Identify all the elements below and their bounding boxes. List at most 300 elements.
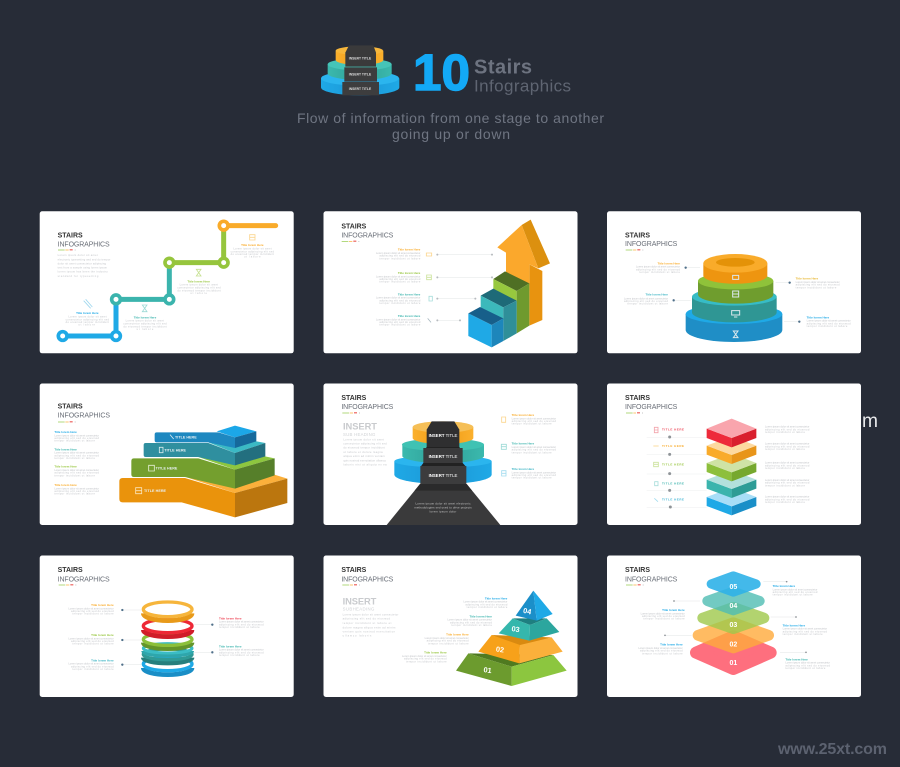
label: 05: Title lorem Here xyxy=(773,584,796,588)
label: right 2: Title lorem Here xyxy=(512,442,535,446)
intro paragraph: text from a sample using lorem ipsum xyxy=(58,266,108,270)
label: right bottom xyxy=(807,315,851,328)
insert heading: INSERT xyxy=(343,596,377,606)
insert paragraph: ut labore et dolore magna xyxy=(343,450,383,454)
icon: pencil xyxy=(84,299,92,308)
label: right 3: tempor incididunt ut labore xyxy=(512,476,552,480)
label: step 1: Title lorem Here xyxy=(76,311,99,315)
label: right top: tempor incididunt ut labore xyxy=(796,285,837,289)
label: left 3: Title lorem Here xyxy=(91,658,114,662)
label: 05: tempor incididunt ut labore xyxy=(773,593,813,597)
label: 03: Title lorem Here xyxy=(783,623,806,627)
label list: Title lorem Here xyxy=(54,483,77,487)
label: left 2: Lorem ipsum dolor sit amet consectetur xyxy=(68,636,114,640)
row icons and leader lines xyxy=(426,253,493,322)
label: right 2: tempor incididunt ut labore xyxy=(512,450,552,454)
panel heading: STAIRS xyxy=(341,223,367,230)
intro paragraph: dolor sit amet consectetur adipiscing xyxy=(58,261,107,265)
label: row 4: Title lorem Here xyxy=(398,314,421,318)
pyramid numbers: 03 xyxy=(511,624,520,634)
label: 03: Title lorem Here xyxy=(469,614,492,618)
label: right 2: tempor incididunt ut labore xyxy=(219,653,260,657)
label: 04: tempor incididunt ut labore xyxy=(643,617,685,621)
label: 02: adipiscing elit sed do eiusmod xyxy=(427,639,469,643)
right text blocks: tempor incididunt ut labore xyxy=(765,430,806,434)
label: right 3 xyxy=(502,467,557,480)
watermark fragment: m: m xyxy=(862,411,878,432)
label: row 1: tempor incididunt ut labore xyxy=(379,256,421,260)
panel heading xyxy=(341,567,394,585)
label: 03: adipiscing elit sed do eiusmod xyxy=(450,620,493,624)
step labels: TITLE HERE xyxy=(144,489,167,493)
panel heading: STAIRS xyxy=(58,232,83,239)
label: row 4: tempor incididunt ut labore xyxy=(379,323,421,327)
panel heading xyxy=(341,223,394,242)
diamond numbers: 01 xyxy=(729,660,737,667)
label: step 3: ut labore xyxy=(190,291,208,295)
insert paragraph: Lorem ipsum dolor sit amet consectetur xyxy=(343,612,398,616)
label: row 4: Lorem ipsum dolor sit amet consectetur xyxy=(376,317,420,321)
chart: four-tier cake xyxy=(686,254,782,342)
label: step 2: ut labore xyxy=(137,327,154,331)
label: left 1: Title lorem Here xyxy=(91,603,114,607)
label: 03 xyxy=(771,616,828,636)
label: right 1: Title lorem Here xyxy=(512,413,535,417)
chart: stacked rings xyxy=(143,602,192,675)
panel heading: STAIRS xyxy=(625,567,650,574)
right text blocks: tempor incididunt ut labore xyxy=(765,500,806,504)
label list: tempor incididunt ut labore xyxy=(54,439,96,443)
panel heading: STAIRS xyxy=(341,395,367,402)
panel: insert title cake with dark stairs xyxy=(324,384,578,525)
label list: Title lorem Here xyxy=(54,430,77,434)
label: left bottom xyxy=(624,293,669,306)
insert heading xyxy=(343,422,377,437)
panel heading xyxy=(625,232,678,250)
label: 01: tempor incididunt ut labore xyxy=(785,666,826,670)
diamond numbers: 02 xyxy=(729,642,737,649)
label: right 2: Lorem ipsum dolor sit amet consectetur xyxy=(219,648,264,652)
left labels with icons: TITLE HERE xyxy=(662,462,684,466)
panel heading xyxy=(625,567,678,585)
label: row 4 xyxy=(376,314,421,327)
insert paragraph: Lorem ipsum dolor sit amet xyxy=(343,437,384,441)
label: row 2: Lorem ipsum dolor sit amet consectetur xyxy=(376,274,420,278)
label: row 3: tempor incididunt ut labore xyxy=(379,301,421,305)
label: left top: adipiscing elit sed do eiusmod xyxy=(636,267,681,271)
label: right 1: adipiscing elit sed do eiusmod xyxy=(219,622,264,626)
label: left 2: adipiscing elit sed do eiusmod xyxy=(71,639,114,643)
intro paragraph: standard for typesetting xyxy=(58,274,99,278)
label: left 2: Title lorem Here xyxy=(91,633,114,637)
right text blocks: Lorem ipsum dolor sit amet consectetur xyxy=(765,442,809,446)
insert heading xyxy=(343,596,377,612)
insert heading: SUB HEADING xyxy=(343,432,376,437)
label: 01: Title lorem Here xyxy=(424,651,447,655)
chart: 3D stairs with arrow xyxy=(468,220,550,347)
step labels: TITLE HERE xyxy=(164,448,187,452)
label list: tempor incididunt ut labore xyxy=(54,473,96,477)
label: right 1: tempor incididunt ut labore xyxy=(512,422,552,426)
label: row 2: adipiscing elit sed do eiusmod xyxy=(379,277,421,281)
label: right top: adipiscing elit sed do eiusmod xyxy=(796,283,840,287)
label: step 4: ut labore xyxy=(244,255,261,259)
leader lines with dots xyxy=(672,266,800,323)
label: 04: Lorem ipsum dolor sit amet consectetur xyxy=(641,611,685,615)
right text blocks: Lorem ipsum dolor sit amet consectetur xyxy=(765,461,809,465)
label: left top: tempor incididunt ut labore xyxy=(639,270,681,274)
label: step 3: Title lorem Here xyxy=(187,279,210,283)
label: step 3 xyxy=(177,279,221,295)
right text blocks: adipiscing elit sed do eiusmod xyxy=(765,497,810,501)
label: right 2: adipiscing elit sed do eiusmod xyxy=(219,650,264,654)
label: 01 xyxy=(402,651,447,663)
right text blocks: adipiscing elit sed do eiusmod xyxy=(765,463,810,467)
label: 04: Title lorem Here xyxy=(485,596,508,600)
label: step 1: do eiusmod tempor incididunt xyxy=(66,320,109,324)
label: 02: tempor incididunt ut labore xyxy=(428,641,469,645)
label: left top xyxy=(636,261,681,274)
label: left bottom: adipiscing elit sed do eiusmod xyxy=(624,299,669,303)
label: step 3: Lorem ipsum dolor sit amet xyxy=(180,283,218,287)
pyramid numbers xyxy=(483,606,533,675)
insert paragraph: dolore magna aliqua enim ad minim xyxy=(343,625,396,629)
intro paragraph: Lorem ipsum dolor sit amet xyxy=(58,253,98,257)
right text blocks: Lorem ipsum dolor sit amet consectetur xyxy=(765,425,809,429)
label: 04 xyxy=(463,596,508,609)
label list: Lorem ipsum dolor sit amet consectetur xyxy=(54,468,99,472)
insert paragraph: veniam quis nostrud exercitation xyxy=(343,629,396,633)
label: left 1 xyxy=(68,603,114,616)
label: right 1: adipiscing elit sed do eiusmod xyxy=(512,419,557,423)
panel heading xyxy=(58,232,110,250)
label: step 4: do eiusmod tempor incididunt xyxy=(231,252,274,256)
chart: pyramid xyxy=(456,591,567,686)
label: 01: adipiscing elit sed do eiusmod xyxy=(785,663,831,667)
insert paragraph: consectetur adipiscing elit sed xyxy=(343,442,387,446)
dark stair titles: INSERT TITLE xyxy=(429,473,457,478)
panel heading: INFOGRAPHICS xyxy=(58,241,110,248)
label: row 1 xyxy=(376,248,421,260)
label: 03: adipiscing elit sed do eiusmod xyxy=(783,629,828,633)
label: 03: Lorem ipsum dolor sit amet consectetur xyxy=(783,627,827,631)
label: step 3: consectetur adipiscing elit sed xyxy=(177,286,221,290)
label: step 2: Lorem ipsum dolor sit amet xyxy=(126,319,164,323)
panel heading xyxy=(625,395,678,413)
insert paragraph: do eiusmod tempor incididunt xyxy=(343,446,385,450)
label: right 2: Lorem ipsum dolor sit amet consectetur xyxy=(512,445,556,449)
dark stair titles xyxy=(429,433,457,478)
label: right 3: adipiscing elit sed do eiusmod xyxy=(512,473,557,477)
pyramid numbers: 04 xyxy=(522,606,533,617)
label: step 4 xyxy=(231,243,275,259)
insert paragraph: laboris nisi ut aliquip ex ea xyxy=(343,462,387,466)
intro paragraph xyxy=(58,253,110,278)
label: step 4: consectetur adipiscing elit sed xyxy=(231,249,275,253)
insert paragraph: adipiscing elit sed do eiusmod xyxy=(343,617,391,621)
dark stairs xyxy=(387,421,500,525)
label: right bottom: adipiscing elit sed do eiusmod xyxy=(807,321,851,325)
label: row 3 xyxy=(376,292,421,305)
pyramid numbers: 01 xyxy=(483,665,492,675)
label: step 2: consectetur adipiscing elit sed xyxy=(123,322,167,326)
label: right 1 xyxy=(219,616,264,629)
right text blocks: Lorem ipsum dolor sit amet consectetur xyxy=(765,478,809,482)
label: 05: adipiscing elit sed do eiusmod xyxy=(773,590,818,594)
label list: Lorem ipsum dolor sit amet consectetur xyxy=(54,451,99,455)
label: left top: Lorem ipsum dolor sit amet consectetur xyxy=(636,265,680,269)
label: right 1: Title lorem Here xyxy=(219,616,242,620)
label: row 4: adipiscing elit sed do eiusmod xyxy=(379,320,421,324)
label: 01: Title lorem Here xyxy=(785,657,808,661)
label: 03: tempor incididunt ut labore xyxy=(451,623,493,627)
chart: three-tier cake xyxy=(394,421,492,484)
header title: Infographics: Infographics xyxy=(474,77,571,96)
label: 02: Title lorem Here xyxy=(446,633,469,637)
label: row 2: Title lorem Here xyxy=(398,271,421,275)
right text blocks xyxy=(765,425,810,504)
panel heading xyxy=(58,567,110,585)
header number 10: 10 xyxy=(413,44,470,101)
label list: adipiscing elit sed do eiusmod xyxy=(54,436,100,440)
right text blocks: adipiscing elit sed do eiusmod xyxy=(765,444,810,448)
panel: stacked isometric blocks xyxy=(607,384,861,525)
panel heading: INFOGRAPHICS xyxy=(341,232,394,239)
dark stair body text: methodologies sed used to drive projects xyxy=(414,506,472,510)
left labels with icons: TITLE HERE xyxy=(662,428,684,432)
label: left 2: tempor incididunt ut labore xyxy=(72,642,114,646)
panel: layered steps xyxy=(40,384,294,525)
panel heading: INFOGRAPHICS xyxy=(58,413,110,420)
insert paragraph: aliqua enim ad minim veniam xyxy=(343,454,385,458)
tagline xyxy=(297,110,604,142)
label: left 3: adipiscing elit sed do eiusmod xyxy=(71,664,114,668)
diamond numbers xyxy=(729,584,737,667)
tagline: Flow of information from one stage to another xyxy=(297,110,604,126)
label list xyxy=(54,430,100,496)
label: step 2: Title lorem Here xyxy=(134,315,157,319)
label: right 2 xyxy=(501,442,557,454)
insert heading: INSERT xyxy=(343,422,377,432)
label: right 2 xyxy=(219,644,264,657)
step labels xyxy=(136,435,197,494)
label: 01: tempor incididunt ut labore xyxy=(406,659,447,663)
label: left 1: Lorem ipsum dolor sit amet consectetur xyxy=(68,606,114,610)
panel: stairs line xyxy=(40,211,294,353)
left labels with icons: TITLE HERE xyxy=(662,444,684,448)
label: step 1: consectetur adipiscing elit sed xyxy=(66,317,110,321)
insert paragraph: tempor incididunt ut labore et xyxy=(343,621,392,625)
header logo: stacked stairs: INSERT TITLE xyxy=(349,56,372,60)
panel heading: INFOGRAPHICS xyxy=(341,576,394,583)
chart: 3D layered steps xyxy=(119,426,287,517)
label: 03 xyxy=(447,614,493,627)
panel heading xyxy=(58,404,110,422)
step labels: TITLE HERE xyxy=(156,466,178,470)
label list: Title lorem Here xyxy=(54,465,77,469)
label: right bottom: Lorem ipsum dolor sit amet consectetur xyxy=(807,319,851,323)
label: right 3: Lorem ipsum dolor sit amet consectetur xyxy=(512,470,556,474)
intro paragraph: lorem ipsum has been the industry xyxy=(58,270,108,274)
label: step 1: Lorem ipsum dolor sit amet xyxy=(68,314,107,318)
header logo: stacked stairs xyxy=(321,45,399,95)
panel heading: STAIRS xyxy=(625,395,650,402)
icon: box orange xyxy=(250,235,255,240)
label: 05: Lorem ipsum dolor sit amet consectetur xyxy=(773,587,817,591)
label: row 2: tempor incididunt ut labore xyxy=(379,280,421,284)
panel heading: INFOGRAPHICS xyxy=(58,576,110,583)
right text blocks: tempor incididunt ut labore xyxy=(765,466,806,470)
label: right 1: Lorem ipsum dolor sit amet consectetur xyxy=(219,620,264,624)
label: 02: Lorem ipsum dolor sit amet consectetur xyxy=(425,636,469,640)
label: 01: Lorem ipsum dolor sit amet consectetur xyxy=(402,654,447,658)
panel heading: STAIRS xyxy=(58,404,83,411)
label: 01 xyxy=(780,651,831,670)
label: 04: adipiscing elit sed do eiusmod xyxy=(642,614,685,618)
insert heading: SUBHEADING xyxy=(343,607,375,612)
label: left 2 xyxy=(68,633,114,646)
insert paragraph xyxy=(343,612,398,638)
dark stair titles: INSERT TITLE xyxy=(429,433,457,438)
right text blocks: adipiscing elit sed do eiusmod xyxy=(765,481,810,485)
label list: Title lorem Here xyxy=(54,447,77,451)
label: left 3 xyxy=(68,658,114,671)
label: 01: adipiscing elit sed do eiusmod xyxy=(404,657,447,661)
label: 04: Lorem ipsum dolor sit amet consectetur xyxy=(463,600,507,604)
label: 01: Lorem ipsum dolor sit amet consectetur xyxy=(785,661,830,665)
label: row 3: Lorem ipsum dolor sit amet consectetur xyxy=(376,296,420,300)
label: right top: Title lorem Here xyxy=(796,277,819,281)
label: right 2: adipiscing elit sed do eiusmod xyxy=(512,448,557,452)
header logo: stacked stairs: INSERT TITLE xyxy=(349,87,372,91)
label: row 1: Title lorem Here xyxy=(398,248,421,252)
label list: adipiscing elit sed do eiusmod xyxy=(54,453,100,457)
dark stair titles: INSERT TITLE xyxy=(429,454,457,459)
panel: stacked cylinders xyxy=(607,211,861,353)
label: 04: tempor incididunt ut labore xyxy=(467,605,508,609)
label: left bottom: Lorem ipsum dolor sit amet consectetur xyxy=(624,296,668,300)
label: right bottom: tempor incididunt ut labore xyxy=(807,324,848,328)
label list: tempor incididunt ut labore xyxy=(54,456,96,460)
right text blocks: tempor incididunt ut labore xyxy=(765,447,806,451)
dark stair body text xyxy=(414,502,472,514)
label: step 4: Title lorem Here xyxy=(241,243,264,247)
left labels with icons xyxy=(647,427,707,508)
label: step 1 xyxy=(66,311,110,327)
label: row 1: adipiscing elit sed do eiusmod xyxy=(379,254,421,258)
icon: hourglass green xyxy=(196,269,201,276)
stepped path line xyxy=(58,221,276,340)
label: 04 xyxy=(641,600,700,621)
diamond numbers: 05 xyxy=(729,584,737,591)
label: left 3: Lorem ipsum dolor sit amet consectetur xyxy=(68,662,114,666)
label: right 2: Title lorem Here xyxy=(219,644,242,648)
intro paragraph: electronic typesetting and sed do tempor xyxy=(58,257,110,261)
label: 04: adipiscing elit sed do eiusmod xyxy=(465,602,508,606)
icon: hourglass xyxy=(142,305,147,312)
label: right top xyxy=(796,277,840,289)
label: step 2: do eiusmod tempor incididunt xyxy=(123,324,167,328)
diamond numbers: 04 xyxy=(729,603,737,610)
left labels with icons: TITLE HERE xyxy=(662,482,684,486)
header logo: stacked stairs: INSERT TITLE xyxy=(349,72,372,76)
panel heading: INFOGRAPHICS xyxy=(341,404,394,411)
label list: adipiscing elit sed do eiusmod xyxy=(54,489,100,493)
right text blocks: tempor incididunt ut labore xyxy=(765,483,806,487)
panel heading: INFOGRAPHICS xyxy=(625,576,678,583)
watermark: www.25xt.com xyxy=(777,741,887,758)
right text blocks: Lorem ipsum dolor sit amet consectetur xyxy=(765,495,809,499)
label: right 3: Title lorem Here xyxy=(512,467,535,471)
pyramid numbers: 02 xyxy=(495,644,505,655)
label: 02: adipiscing elit sed do eiusmod xyxy=(640,649,683,653)
leader lines with dots xyxy=(121,609,213,666)
label: 03: Lorem ipsum dolor sit amet consectetur xyxy=(447,618,492,622)
label: 03: tempor incididunt ut labore xyxy=(783,632,823,636)
label: 02: Title lorem Here xyxy=(660,643,683,647)
label: left bottom: Title lorem Here xyxy=(645,293,668,297)
label: right top: Lorem ipsum dolor sit amet consectetur xyxy=(796,280,840,284)
label list: Lorem ipsum dolor sit amet consectetur xyxy=(54,486,99,490)
label: right 1: tempor incididunt ut labore xyxy=(219,625,260,629)
label list: adipiscing elit sed do eiusmod xyxy=(54,471,100,475)
label: row 1: Lorem ipsum dolor sit amet consectetur xyxy=(376,251,420,255)
step labels: TITLE HERE xyxy=(175,435,197,439)
label: left 1: adipiscing elit sed do eiusmod xyxy=(71,609,114,613)
panel heading: STAIRS xyxy=(341,567,367,574)
label: step 2 xyxy=(123,315,167,331)
panel heading: STAIRS xyxy=(58,567,83,574)
label: row 3: Title lorem Here xyxy=(398,292,421,296)
panel: translucent diamonds xyxy=(607,556,861,697)
diamond numbers: 03 xyxy=(729,622,737,629)
panel heading: INFOGRAPHICS xyxy=(625,404,678,411)
tier icons xyxy=(732,275,740,338)
insert paragraph: quis nostrud exercitation ullamco xyxy=(343,458,387,462)
tagline: going up or down xyxy=(392,126,510,142)
label: row 3: adipiscing elit sed do eiusmod xyxy=(379,298,421,302)
label: left top: Title lorem Here xyxy=(657,261,680,265)
label: 02: tempor incididunt ut labore xyxy=(642,651,683,655)
label: step 3: do eiusmod tempor incididunt xyxy=(177,288,221,292)
label: left bottom: tempor incididunt ut labore xyxy=(627,302,669,306)
label: step 4: Lorem ipsum dolor sit amet xyxy=(233,246,272,250)
chart: stacked diamonds xyxy=(696,576,771,669)
right text blocks: adipiscing elit sed do eiusmod xyxy=(765,427,810,431)
label: left 3: tempor incididunt ut labore xyxy=(72,667,114,671)
panel: 3D pyramid xyxy=(324,556,578,697)
label: row 2 xyxy=(376,271,421,284)
label: 02 xyxy=(638,634,692,655)
label list: tempor incididunt ut labore xyxy=(54,492,96,496)
label: right 1 xyxy=(502,413,557,426)
label: 02 xyxy=(425,633,469,645)
label: right 1: Lorem ipsum dolor sit amet consectetur xyxy=(512,416,556,420)
dark stair body text: Lorem ipsum dolor sit amet electronic xyxy=(415,502,471,506)
dark stair body text: lorem ipsum dolor xyxy=(430,510,456,514)
insert paragraph: ullamco laboris xyxy=(343,634,372,638)
panel: stairs arrow xyxy=(324,211,578,353)
label list: Lorem ipsum dolor sit amet consectetur xyxy=(54,433,99,437)
label: 02: Lorem ipsum dolor sit amet consectetur xyxy=(638,646,683,650)
left labels with icons: TITLE HERE xyxy=(662,498,684,502)
panel heading xyxy=(341,395,394,413)
panel heading: INFOGRAPHICS xyxy=(625,241,678,248)
label: 05 xyxy=(763,581,818,597)
label: 04: Title lorem Here xyxy=(662,608,685,612)
header title: Stairs: Stairs xyxy=(474,56,532,78)
label: left 1: tempor incididunt ut labore xyxy=(72,612,114,616)
